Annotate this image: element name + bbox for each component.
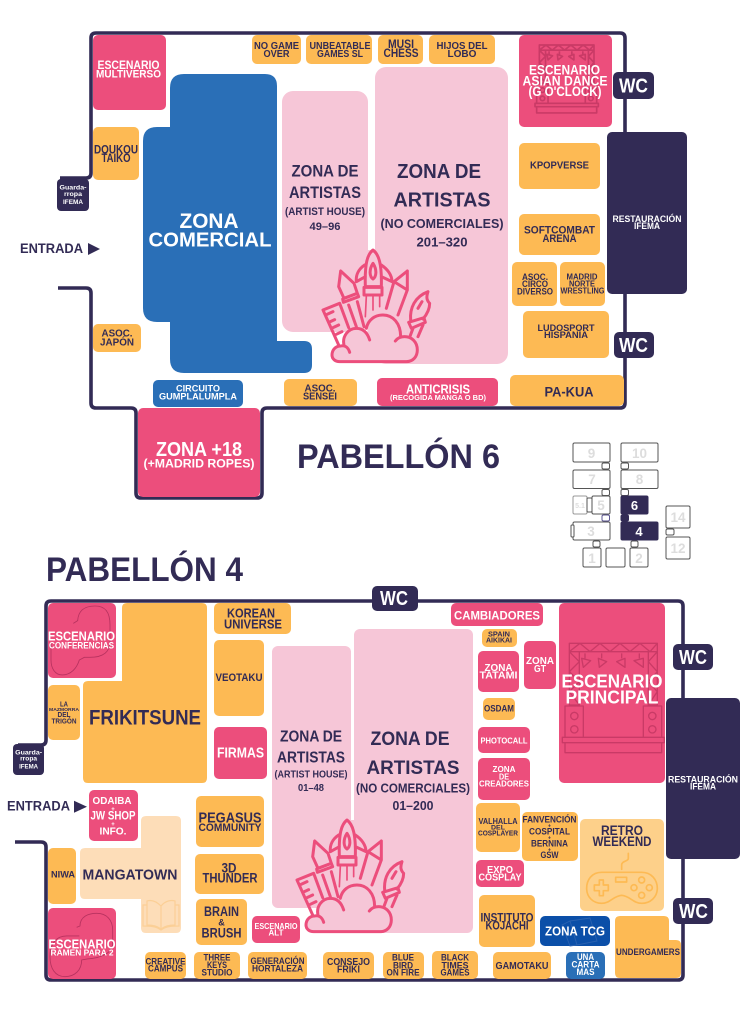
expo cosplay: EXPO: [487, 864, 513, 876]
asoc circo diverso: DIVERSO: [517, 286, 553, 296]
title: pabellón 4: PABELLÓN 4: [46, 551, 243, 589]
doukou taiko: [93, 127, 139, 180]
zona +18: [138, 408, 260, 497]
escenario multiverso: MULTIVERSO: [96, 68, 161, 80]
zona de artistas no comerciales 201-320: ARTISTAS: [394, 189, 490, 212]
zona de artistas artist house 49-96: [282, 91, 368, 332]
photocall: PHOTOCALL: [480, 735, 528, 745]
black times games: GAMES: [440, 968, 470, 979]
zona de artistas no comerciales 01-200: (NO COMERCIALES): [356, 781, 470, 795]
creative campus: CAMPUS: [148, 964, 183, 974]
escenario ramen para 2: RAMEN PARA 2: [50, 948, 114, 958]
una carta más: [566, 952, 605, 979]
wc top: [372, 586, 418, 611]
frikitsune: FRIKITSUNE: [89, 706, 201, 729]
icon: speech bubbles: [51, 606, 110, 675]
escenario principal: ESCENARIO: [562, 671, 662, 691]
fanvención cospital bernina gsw: +: [548, 824, 551, 830]
valhalla del cosplayer: [476, 803, 520, 852]
zona de artistas artist house 49-96: (ARTIST HOUSE): [285, 206, 365, 218]
asoc circo diverso: [512, 262, 557, 306]
zona tatami: ZONA: [484, 662, 513, 674]
zona de creadores: ZONA: [492, 764, 516, 774]
consejo friki: CONSEJO: [327, 956, 370, 968]
guardarropa ifema: [57, 179, 89, 211]
escenario multiverso: ESCENARIO: [98, 60, 160, 72]
odaiba jw shop info: [89, 790, 138, 841]
zona comercial: [143, 74, 312, 373]
three keys studio: THREE: [204, 952, 230, 962]
brain & brush: BRUSH: [202, 925, 242, 940]
mini map of pavilions: 2: [635, 551, 643, 566]
korean universe: UNIVERSE: [224, 616, 282, 631]
zona gt: GT: [534, 663, 546, 675]
valhalla del cosplayer: COSPLAYER: [478, 829, 518, 838]
niwa: [48, 848, 76, 904]
black times games: [432, 951, 478, 979]
fanvención cospital bernina gsw: FANVENCIÓN: [522, 814, 576, 825]
generación hortaleza: [248, 952, 307, 979]
wc right lower: WC: [679, 901, 708, 923]
pegasus community: [196, 796, 264, 847]
zona tatami: TATAMI: [480, 670, 518, 682]
asoc circo diverso: CIRCO: [522, 279, 548, 289]
doukou taiko: DOUKOU: [94, 144, 138, 156]
zona de creadores: DE: [499, 771, 509, 781]
icon: cards: [562, 918, 597, 946]
mini map of pavilions: 5: [597, 498, 605, 513]
black times games: BLACK: [441, 953, 469, 964]
asoc circo diverso: ASOC.: [522, 272, 548, 282]
zona comercial: COMERCIAL: [148, 230, 272, 252]
mini map of pavilions: 7: [588, 472, 596, 487]
niwa: NIWA: [51, 870, 75, 881]
osdam: OSDAM: [484, 703, 514, 713]
restauración ifema: RESTAURACIÓN: [668, 773, 738, 785]
mini map of pavilions: [571, 443, 690, 567]
restauración ifema: IFEMA: [634, 221, 660, 232]
osdam: [483, 698, 515, 720]
madrid norte wrestling: [560, 262, 605, 306]
consejo friki: FRIKI: [337, 964, 360, 976]
zona de artistas no comerciales 01-200: ZONA DE: [370, 729, 450, 750]
3d thunder: [195, 854, 264, 894]
odaiba jw shop info: +: [111, 807, 115, 813]
escenario alt: ESCENARIO: [254, 921, 298, 931]
una carta más: MAS: [576, 967, 594, 978]
odaiba jw shop info: ODAIBA: [92, 795, 132, 807]
guardarropa ifema: IFEMA: [63, 200, 84, 206]
hijos del lobo: [429, 35, 495, 64]
brain & brush: [196, 899, 247, 945]
blue bird on fire: [383, 952, 424, 979]
zona +18: ZONA +18: [156, 439, 242, 461]
la mazmorra del trigón: LA: [60, 700, 68, 709]
escenario multiverso: [93, 35, 166, 110]
photocall: [478, 727, 530, 753]
madrid norte wrestling: MADRID: [566, 273, 598, 282]
retro weekend: RETRO: [601, 823, 643, 838]
expo cosplay: COSPLAY: [478, 871, 522, 883]
anticrisis: [377, 378, 498, 406]
cambiadores: [451, 603, 543, 626]
pa-kua: [510, 375, 624, 406]
escenario ramen para 2: [48, 908, 116, 979]
anticrisis: ANTICRISIS: [406, 382, 470, 396]
mini map of pavilions: 6: [631, 498, 638, 513]
title: pabellón 6: PABELLÓN 6: [297, 438, 500, 476]
wc top: WC: [619, 76, 648, 98]
mini map of pavilions: 14: [670, 510, 686, 525]
mini map of pavilions: 9: [588, 446, 595, 461]
asoc sensei: [284, 379, 357, 406]
fanvención cospital bernina gsw: COSPITAL: [529, 827, 570, 837]
panel: pabellón 4 floor plan: [7, 586, 740, 980]
wc bottom: WC: [619, 335, 648, 357]
zona de artistas artist house 01-48: ZONA DE: [280, 729, 342, 746]
firmas: FIRMAS: [217, 745, 264, 762]
una carta más: CARTA: [572, 960, 600, 971]
unbeatable games sl: GAMES SL: [317, 48, 363, 60]
wall outline pabellón 6: [58, 33, 625, 498]
guardarropa ifema: rropa: [20, 756, 38, 762]
zona de artistas no comerciales 201-320: ZONA DE: [397, 160, 481, 183]
black times games: TIMES: [442, 960, 468, 971]
zona +18: (+MADRID ROPES): [144, 457, 254, 471]
wall outline pabellón 4: [15, 601, 683, 980]
generación hortaleza: HORTALEZA: [252, 964, 303, 974]
veotaku: [214, 640, 264, 716]
zona comercial: ZONA: [180, 210, 238, 233]
escenario ramen para 2: ESCENARIO: [48, 936, 116, 951]
brain & brush: BRAIN: [204, 904, 239, 919]
la mazmorra del trigón: [48, 685, 80, 740]
guardarropa ifema: Guarda-: [60, 186, 86, 192]
musi chess: MUSI: [388, 39, 414, 51]
zona de artistas no comerciales 01-200: ARTISTAS: [366, 758, 460, 779]
pegasus community: PEGASUS: [198, 809, 262, 826]
la mazmorra del trigón: TRIGÓN: [52, 716, 76, 725]
zona de artistas artist house 01-48: [272, 646, 351, 908]
mini map of pavilions: 8: [636, 472, 644, 487]
musi chess: [378, 35, 423, 64]
softcombat arena: ARENA: [542, 233, 577, 245]
asoc japón: JAPÓN: [100, 335, 134, 348]
zona de artistas no comerciales 201-320: 201–320: [416, 236, 468, 250]
escenario alt: [252, 916, 300, 943]
fanvención cospital bernina gsw: +: [548, 836, 551, 842]
entrada: ENTRADA: [20, 241, 83, 256]
escenario conferencias: ESCENARIO: [48, 629, 115, 644]
three keys studio: KEYS: [207, 960, 227, 970]
fanvención cospital bernina gsw: BERNINA: [531, 839, 568, 849]
wc top: [613, 72, 654, 99]
zona gt: [524, 641, 556, 689]
consejo friki: [323, 952, 374, 979]
spain aikikai: [482, 629, 517, 647]
icon: stage: [535, 45, 598, 113]
retro weekend: [580, 819, 664, 911]
ludosport hispania: HISPANIA: [544, 330, 588, 341]
restauración ifema: RESTAURACIÓN: [612, 213, 682, 225]
asoc sensei: SENSEI: [303, 391, 337, 403]
expo cosplay: [476, 860, 524, 887]
spain aikikai: AIKIKAI: [486, 638, 512, 645]
three keys studio: STUDIO: [202, 967, 232, 977]
korean universe: [214, 603, 291, 634]
zona de creadores: CREADORES: [479, 779, 529, 789]
wc right upper: WC: [679, 647, 707, 669]
escenario principal: PRINCIPAL: [566, 687, 659, 707]
wc top: WC: [380, 588, 408, 610]
mini map of pavilions: 10: [632, 446, 647, 461]
guardarropa ifema: IFEMA: [19, 764, 39, 770]
restauración ifema: IFEMA: [690, 781, 716, 792]
escenario alt: ALT: [268, 928, 284, 938]
escenario conferencias: [48, 603, 116, 678]
odaiba jw shop info: +: [111, 822, 115, 828]
fanvención cospital bernina gsw: [522, 812, 578, 861]
madrid norte wrestling: WRESTLING: [560, 286, 604, 295]
no game over: NO GAME: [254, 40, 299, 52]
mangatown: [80, 816, 181, 933]
unbeatable games sl: [306, 35, 372, 64]
asoc japón: [93, 324, 141, 352]
icon: art supplies pabellón 4: [297, 820, 404, 932]
icon: book: [143, 901, 179, 930]
valhalla del cosplayer: VALHALLA: [478, 817, 518, 826]
doukou taiko: TAIKO: [102, 153, 131, 165]
zona de artistas artist house 49-96: 49–96: [310, 221, 340, 233]
mini map of pavilions: 5.1: [575, 503, 585, 510]
creative campus: CREATIVE: [146, 956, 186, 966]
no game over: [252, 35, 301, 64]
guardarropa ifema: [13, 744, 44, 775]
zona de artistas artist house 49-96: ZONA DE: [292, 162, 358, 181]
icon: speech bubbles: [50, 913, 113, 977]
mini map of pavilions: 12: [670, 541, 686, 556]
una carta más: UNA: [577, 952, 594, 963]
blue bird on fire: BIRD: [393, 960, 413, 971]
guardarropa ifema: rropa: [64, 192, 83, 198]
3d thunder: THUNDER: [202, 871, 258, 886]
kpopverse: [519, 143, 600, 189]
zona tcg: [540, 916, 610, 946]
veotaku: VEOTAKU: [216, 672, 263, 684]
blue bird on fire: ON FIRE: [386, 968, 420, 979]
musi chess: CHESS: [384, 48, 419, 60]
escenario asian dance: (G O'CLOCK): [528, 84, 602, 99]
circuito gumplalumpla: [153, 380, 243, 407]
gamotaku: [493, 952, 551, 979]
la mazmorra del trigón: DEL: [58, 710, 71, 719]
instituto kojachi: INSTITUTO: [480, 913, 534, 925]
zona de artistas artist house 01-48: (ARTIST HOUSE): [274, 769, 348, 781]
restauración ifema: [666, 698, 740, 859]
mini map of pavilions: 1: [588, 551, 596, 566]
escenario principal: [559, 603, 665, 783]
asoc sensei: ASOC.: [304, 382, 336, 394]
icon: game controller: [587, 853, 657, 903]
zona de artistas artist house 01-48: 01–48: [298, 782, 324, 794]
zona de artistas no comerciales 01-200: [354, 629, 473, 933]
blue bird on fire: BLUE: [392, 953, 414, 964]
zona de creadores: [478, 758, 530, 800]
zona tcg: ZONA TCG: [545, 925, 605, 939]
zona de artistas no comerciales 201-320: (NO COMERCIALES): [380, 217, 504, 231]
3d thunder: 3D: [222, 861, 237, 876]
anticrisis: (RECOGIDA MANGA O BD): [390, 395, 486, 402]
creative campus: [145, 952, 186, 979]
gamotaku: GAMOTAKU: [496, 961, 548, 972]
asoc japón: ASOC.: [102, 328, 133, 340]
escenario asian dance: [519, 35, 612, 127]
zona de artistas no comerciales 201-320: [375, 67, 508, 364]
undergamers: UNDERGAMERS: [616, 947, 680, 957]
escenario conferencias: CONFERENCIAS: [49, 640, 114, 650]
zona de artistas artist house 49-96: ARTISTAS: [289, 183, 361, 202]
escenario asian dance: ESCENARIO: [529, 62, 600, 77]
valhalla del cosplayer: DEL: [491, 826, 505, 832]
zona de artistas artist house 01-48: ARTISTAS: [277, 750, 345, 767]
cambiadores: CAMBIADORES: [454, 608, 540, 622]
instituto kojachi: KOJACHI: [486, 921, 528, 933]
madrid norte wrestling: NORTE: [569, 280, 596, 289]
la mazmorra del trigón: MAZMORRA: [49, 707, 80, 712]
zona gt: ZONA: [526, 655, 554, 667]
icon: stage: [562, 643, 664, 753]
hijos del lobo: HIJOS DEL: [436, 40, 488, 52]
no game over: OVER: [264, 48, 290, 60]
mangatown: MANGATOWN: [82, 866, 178, 883]
frikitsune: [83, 603, 207, 783]
korean universe: KOREAN: [227, 606, 275, 621]
instituto kojachi: [479, 895, 535, 947]
brain & brush: &: [218, 918, 225, 928]
firmas: [214, 727, 267, 779]
three keys studio: [194, 952, 240, 979]
softcombat arena: SOFTCOMBAT: [524, 224, 595, 236]
circuito gumplalumpla: GUMPLALUMPLA: [159, 392, 238, 402]
odaiba jw shop info: JW SHOP: [90, 810, 136, 822]
entrada: ENTRADA: [7, 799, 70, 814]
softcombat arena: [519, 214, 600, 255]
circuito gumplalumpla: CIRCUITO: [176, 383, 220, 393]
panel: pabellón 6 floor plan: [20, 33, 687, 498]
pegasus community: COMMUNITY: [198, 822, 262, 834]
escenario asian dance: ASIAN DANCE: [522, 73, 608, 88]
retro weekend: WEEKEND: [592, 834, 652, 849]
fanvención cospital bernina gsw: GSW: [540, 850, 559, 860]
kpopverse: KPOPVERSE: [530, 159, 589, 171]
undergamers: [615, 916, 681, 978]
zona de artistas no comerciales 01-200: 01–200: [392, 799, 434, 813]
zona tatami: [478, 651, 519, 692]
ludosport hispania: [523, 311, 609, 358]
icon: art supplies pabellón 6: [323, 250, 430, 362]
fanvención cospital bernina gsw: +: [548, 848, 551, 854]
restauración ifema: [607, 132, 687, 294]
odaiba jw shop info: INFO.: [100, 825, 127, 837]
mini map of pavilions: 4: [635, 524, 643, 539]
ludosport hispania: LUDOSPORT: [538, 323, 595, 334]
guardarropa ifema: Guarda-: [15, 750, 42, 756]
generación hortaleza: GENERACIÓN: [250, 955, 304, 966]
hijos del lobo: LOBO: [448, 48, 476, 60]
pa-kua: PA-KUA: [544, 385, 594, 400]
spain aikikai: SPAIN: [488, 632, 510, 639]
unbeatable games sl: UNBEATABLE: [310, 40, 370, 52]
mini map of pavilions: 3: [587, 524, 595, 539]
